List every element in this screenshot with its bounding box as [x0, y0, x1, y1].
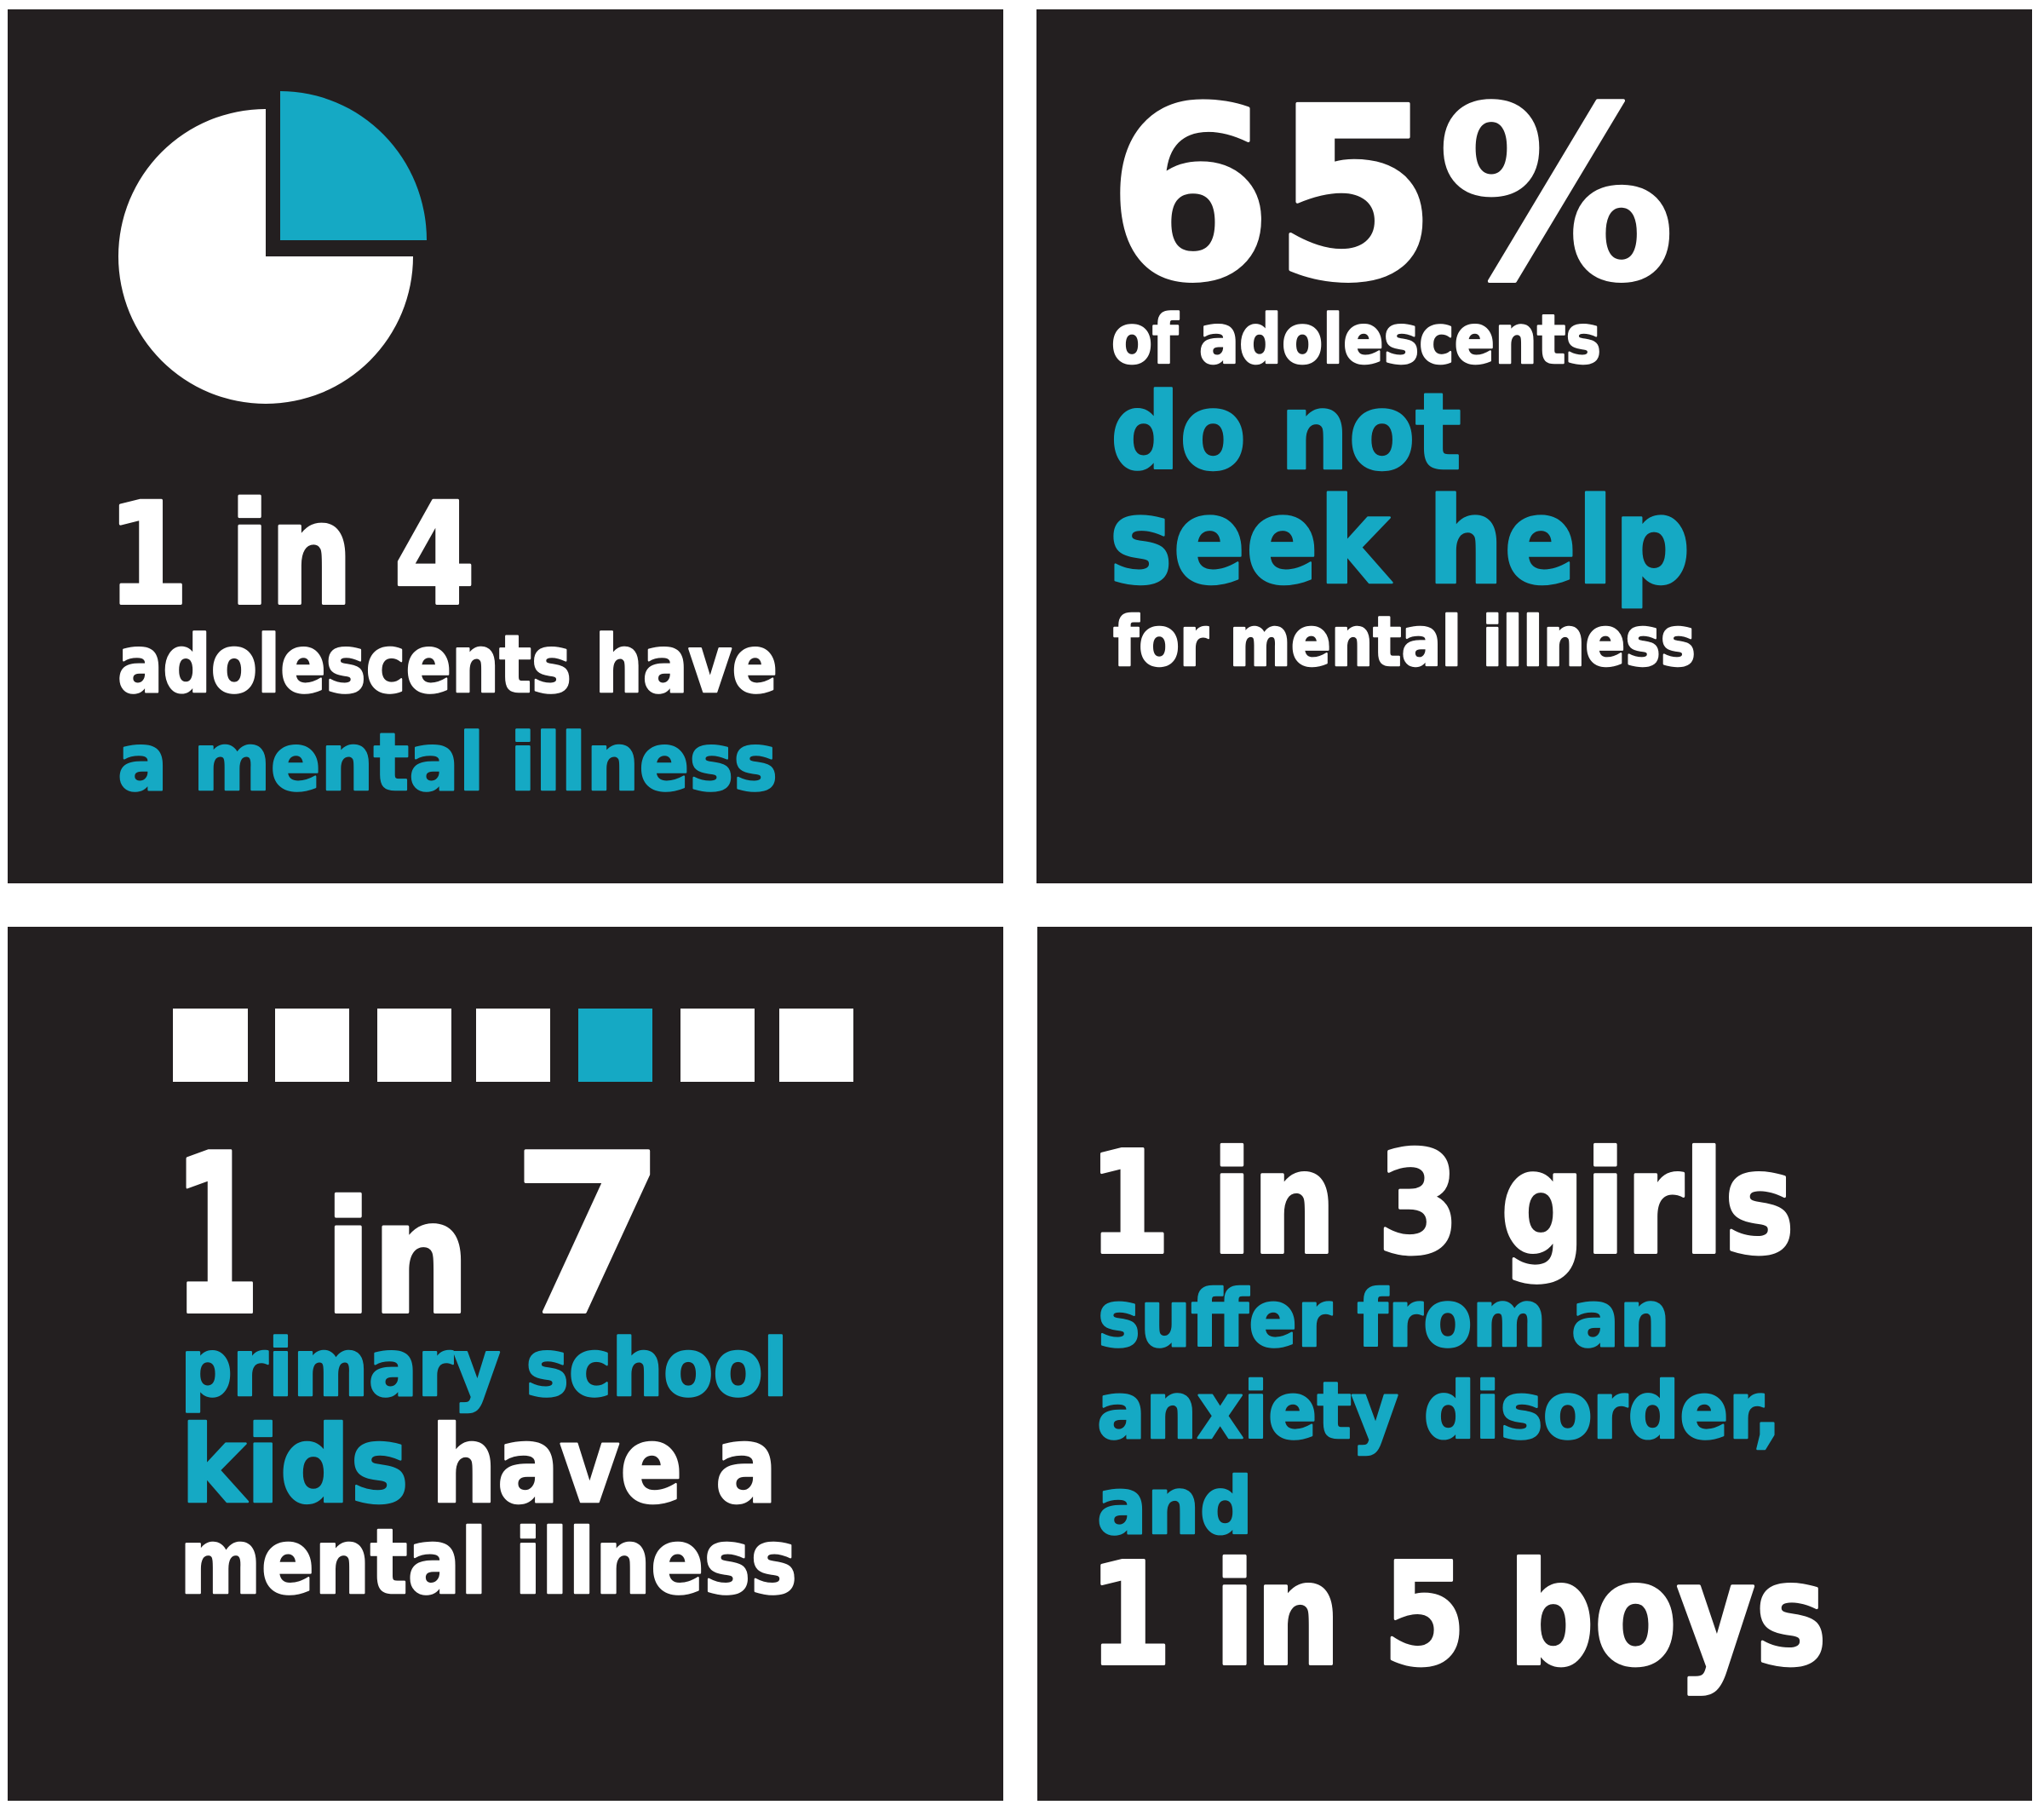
text: adolescents have: adolescents have — [118, 618, 778, 710]
icon: pie chart one quarter — [118, 91, 427, 404]
icon: row of seven squares — [173, 1009, 853, 1082]
heading: 1 in 7: in — [324, 1168, 470, 1348]
text: primary school: primary school — [181, 1322, 788, 1414]
text: for mental illness: for mental illness — [1113, 602, 1696, 681]
text: seek help: seek help — [1109, 473, 1691, 612]
panel: 1 in 4 adolescents — [8, 9, 1003, 883]
heading: 1 in 7 — [173, 1108, 666, 1365]
panel: 1 in 3 girls and 1 in 5 boys — [1037, 927, 2032, 1801]
text: kids have a: kids — [181, 1404, 409, 1527]
panel: 1 in 7 primary school kids — [8, 927, 1003, 1801]
text: mental illness: mental illness — [180, 1510, 797, 1614]
text: suffer from an: suffer from an — [1098, 1273, 1670, 1365]
heading: 1 in 7: 7 — [511, 1108, 666, 1365]
text: of adolescents: of adolescents — [1111, 301, 1601, 379]
heading: 1 in 4: 1 in 4 — [107, 473, 475, 636]
text: kids have a — [181, 1404, 778, 1527]
panel: 65% do not seek help — [1036, 9, 2032, 883]
text: a mental illness: a mental illness — [118, 716, 778, 808]
heading: 65%: 65% — [1107, 57, 1675, 335]
text: anxiety disorder,: anxiety disorder, — [1097, 1365, 1781, 1457]
text: and: and — [1097, 1461, 1253, 1552]
heading: 1 in 7: 1 — [173, 1108, 261, 1365]
text: do not: do not — [1111, 371, 1461, 494]
heading: 1 in 3 girls: 1 in 3 girls — [1088, 1122, 1794, 1286]
text: kids have a: have a — [431, 1404, 778, 1527]
heading: 1 in 5 boys: 1 in 5 boys — [1088, 1533, 1827, 1698]
